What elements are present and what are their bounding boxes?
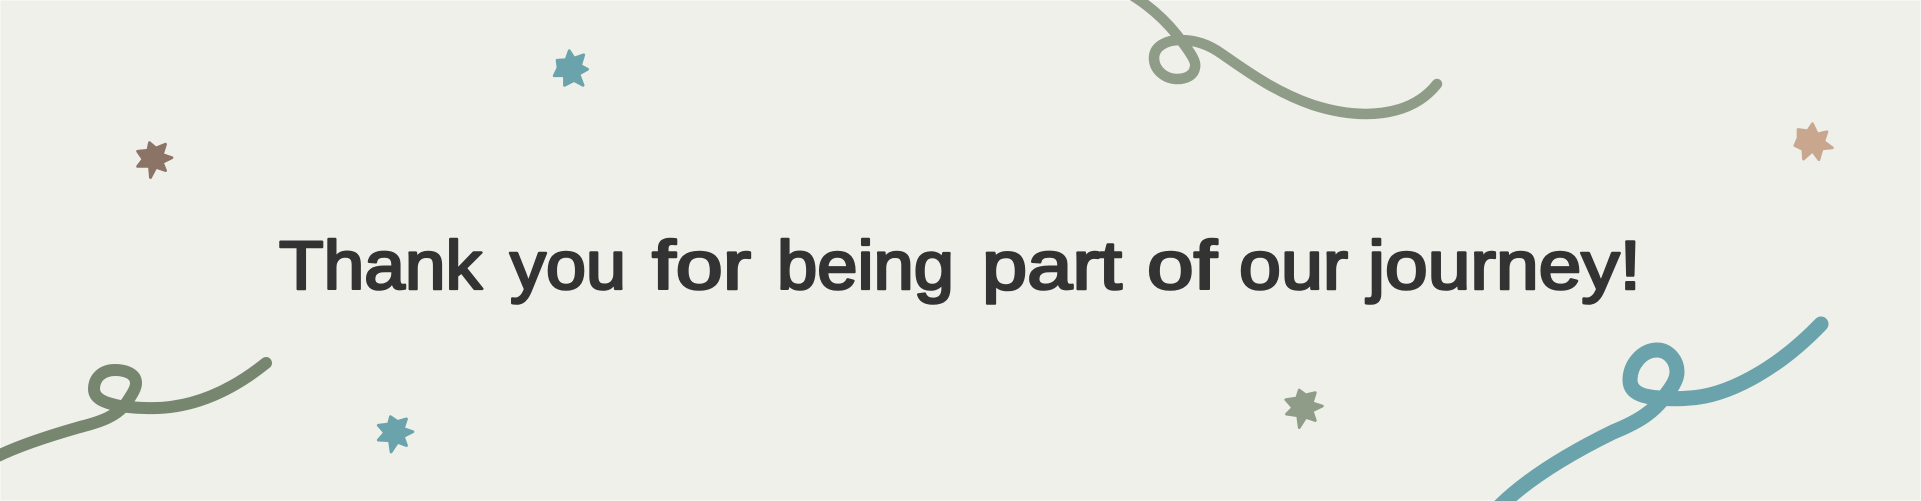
star: teal top [554, 51, 588, 85]
title: being [777, 227, 954, 304]
title: our [1239, 227, 1348, 304]
swirl: bottom left [0, 363, 266, 458]
title: for [652, 227, 751, 304]
swirl: top centre [1130, 0, 1437, 114]
star: sage bottom [1286, 390, 1322, 428]
title: Thank [279, 227, 483, 304]
swirl: bottom right [1496, 324, 1821, 501]
title: of [1147, 227, 1218, 304]
title [279, 227, 1641, 304]
title: part [982, 227, 1122, 304]
star: brown left [138, 143, 172, 178]
title: you [510, 227, 626, 304]
title: journey! [1366, 227, 1641, 304]
star: teal bottom [378, 417, 413, 452]
star: tan right [1795, 124, 1832, 160]
